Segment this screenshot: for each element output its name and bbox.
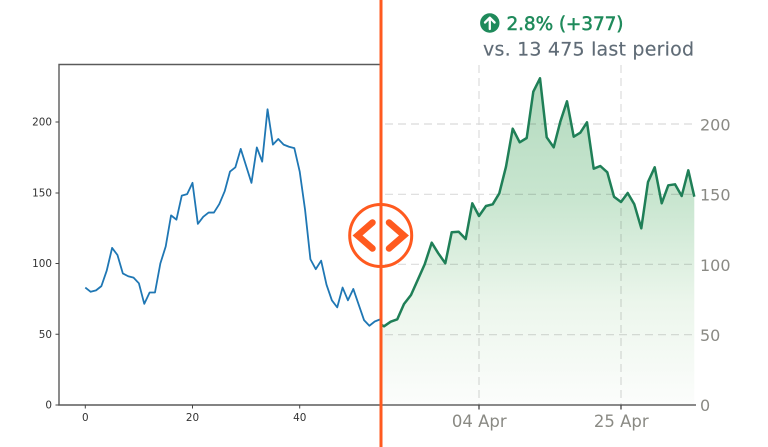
green data line [382,78,694,326]
left chart y axis ticks and labels [32,117,59,412]
right chart x axis [381,405,696,431]
grid lines [385,65,692,405]
right chart y axis labels [700,116,731,415]
slider divider line [380,0,382,447]
left chart x axis ticks and labels [82,405,306,424]
right chart y axis labels: 150 [700,186,731,204]
blue data line [85,109,380,326]
panel: left line chart [32,64,381,424]
left chart x axis ticks and labels: 40 [293,412,306,424]
change value: 2.8% (+377) [506,14,624,35]
green gradient area [382,78,694,405]
icon: green up arrow [480,13,499,33]
icon: left chevron [358,222,372,248]
right chart x axis: 25 Apr [594,412,649,431]
comparison header [480,13,694,61]
left chart x axis ticks and labels: 20 [186,412,199,424]
right chart y axis labels: 50 [700,326,720,345]
comparison text: vs. 13 475 last period [483,38,694,60]
right chart x axis: 04 Apr [452,412,507,431]
left chart x axis ticks and labels: 0 [82,412,89,424]
left chart y axis ticks and labels: 0 [45,400,52,412]
right chart y axis labels: 100 [700,256,731,275]
right chart y axis labels: 200 [700,116,731,134]
left chart y axis ticks and labels: 50 [39,329,52,341]
left chart y axis ticks and labels: 150 [32,188,52,200]
left chart y axis ticks and labels: 100 [32,258,52,270]
slider handle [350,204,412,266]
right chart y axis labels: 0 [700,396,710,415]
icon: right chevron [389,222,404,248]
left chart y axis ticks and labels: 200 [32,117,52,129]
panel: right area chart [381,65,731,431]
left chart axes frame [59,64,381,405]
